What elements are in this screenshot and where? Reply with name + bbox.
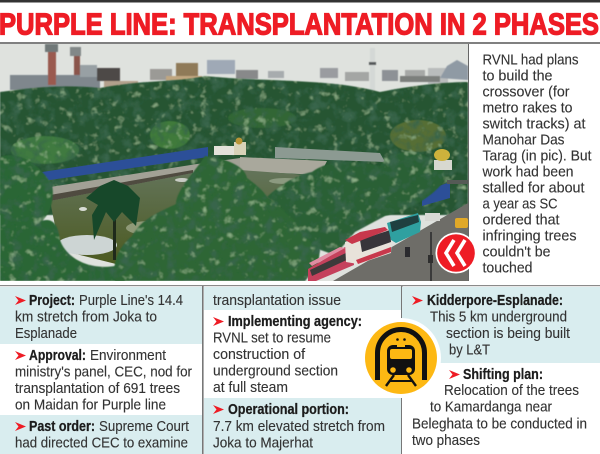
- panel: shifting plan: two phases: [412, 433, 480, 449]
- panel: operational portion: 7.7 km elevated stretch from: [213, 419, 385, 435]
- caption text: Manohar Das: [482, 132, 564, 148]
- panel: operational portion: [204, 398, 401, 454]
- road: [333, 203, 468, 281]
- caption text: a year as SC: [482, 196, 558, 212]
- top rule: [0, 0, 600, 2]
- caption text: switch tracks) at: [482, 116, 586, 132]
- panel: project: km stretch from Joka to: [15, 310, 157, 326]
- panel: shifting plan: to Kamardanga near: [430, 400, 552, 416]
- panel: past order: Past order:: [29, 419, 95, 435]
- panel: shifting plan: Shifting plan:: [463, 367, 543, 383]
- panel: shifting plan: Beleghata to be conducted in: [412, 416, 587, 432]
- panel: implementing agency: Implementing agency:: [228, 314, 362, 330]
- caption text: to build the: [482, 68, 552, 84]
- column divider: [401, 286, 402, 454]
- left trees: [0, 155, 125, 281]
- panel: implementing agency: construction of: [213, 347, 306, 363]
- teal bus: [387, 213, 421, 243]
- pond reflections: [57, 178, 301, 255]
- pond: [51, 170, 302, 264]
- lighter foliage patches: [11, 108, 446, 164]
- panel: past order: had directed CEC to examine: [15, 436, 188, 452]
- panel: kidderpore-esplanade: section is being built: [446, 326, 570, 342]
- panel: project: [0, 287, 202, 344]
- caption text: infringing trees: [482, 228, 576, 244]
- far tree canopy: [0, 76, 468, 215]
- right trees: [267, 152, 445, 255]
- fence near road: [422, 182, 450, 206]
- caption text: metro rakes to: [482, 100, 572, 116]
- left bank: [50, 158, 240, 201]
- caption text: work had been: [482, 164, 574, 180]
- panel: project: Project:: [29, 293, 75, 309]
- panel: past order continued: [204, 287, 401, 310]
- red and white bus: [345, 227, 392, 264]
- panel: past order: [0, 415, 202, 454]
- palm tree: [86, 180, 140, 260]
- road vehicles: [405, 213, 468, 281]
- panel: operational portion: Operational portion:: [228, 402, 349, 418]
- icon: metro train in tunnel: [361, 318, 441, 398]
- caption text: crossover (for: [482, 84, 570, 100]
- top paved bank: [240, 157, 327, 175]
- panel: implementing agency: underground section: [213, 364, 338, 380]
- column divider: [202, 286, 204, 454]
- central tree: [114, 156, 320, 281]
- blue fence: [42, 147, 208, 181]
- skyline buildings: [10, 44, 468, 90]
- caption text: ordered that: [482, 212, 560, 228]
- panel: approval: on Maidan for Purple line: [15, 398, 166, 414]
- panel: project: Esplanade: [15, 326, 77, 342]
- panel: kidderpore-esplanade: [402, 287, 600, 363]
- caption text: [482, 52, 592, 276]
- panel: approval: ministry's panel, CEC, nod for: [15, 364, 192, 380]
- temple gate: [214, 138, 246, 155]
- panel: shifting plan: Relocation of the trees: [444, 383, 579, 399]
- panel: approval: Approval:: [29, 348, 86, 364]
- panel: approval: transplantation of 691 trees: [15, 381, 180, 397]
- panel: implementing agency: at full steam: [213, 380, 288, 396]
- glasshouse structure: [275, 147, 385, 162]
- section rule: [0, 285, 600, 286]
- panel: implementing agency: [204, 310, 401, 398]
- panel: kidderpore-esplanade: This 5 km underground: [430, 310, 567, 326]
- panel: project: Purple Line's 14.4: [79, 293, 183, 309]
- panel: approval: [0, 344, 202, 415]
- photo edge: [468, 44, 469, 281]
- title underline: [0, 42, 600, 44]
- icon: red back chevrons: [436, 232, 476, 274]
- panel: shifting plan: [402, 363, 600, 454]
- caption text: touched: [482, 260, 532, 276]
- pink bus: [308, 247, 354, 281]
- caption text: stalled for about: [482, 180, 584, 196]
- photo: Manohar Das Tarag pond and trees: [0, 44, 468, 281]
- panel: kidderpore-esplanade: by L&T: [449, 342, 490, 358]
- caption text: Tarag (in pic). But: [482, 148, 592, 164]
- flyover: [447, 180, 468, 184]
- panel: implementing agency: RVNL set to resume: [213, 330, 331, 346]
- panel: operational portion: Joka to Majerhat: [213, 436, 313, 452]
- panel: past order: Supreme Court: [99, 419, 189, 435]
- panel: past order continued: transplantation issue: [213, 293, 341, 309]
- golden dome: [434, 149, 452, 170]
- panel: approval: Environment: [90, 348, 166, 364]
- caption text: couldn't be: [482, 244, 550, 260]
- caption text: RVNL had plans: [482, 52, 578, 68]
- panel: kidderpore-esplanade: Kidderpore-Esplanade:: [427, 293, 563, 309]
